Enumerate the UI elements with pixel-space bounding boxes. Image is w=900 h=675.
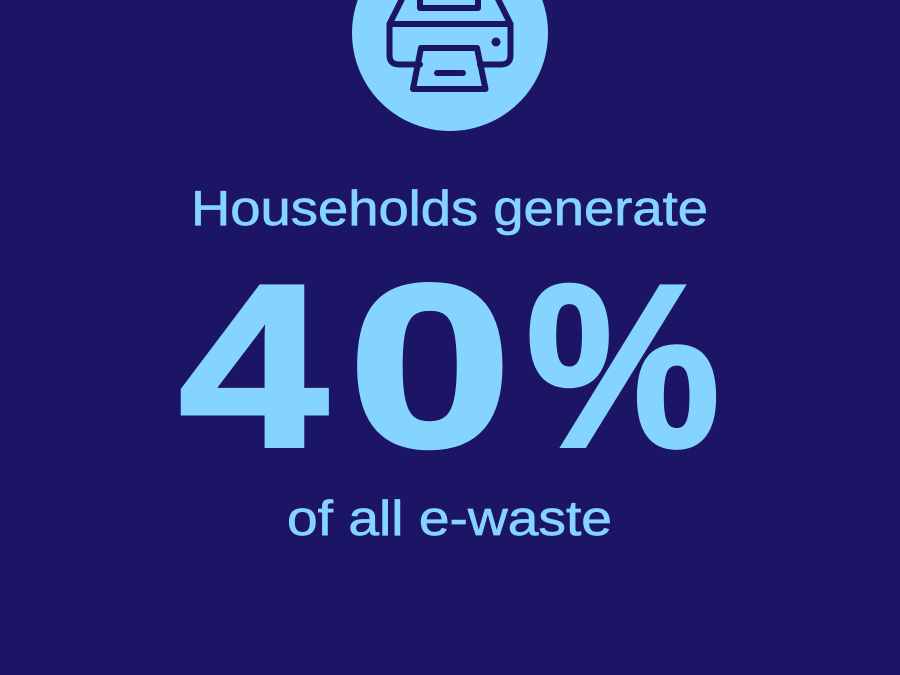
subheading: of all e-waste: of all e-waste xyxy=(287,492,612,546)
big number: 40% xyxy=(179,237,720,496)
big number: 40%: 4 xyxy=(179,237,328,496)
heading: Households generate: Households generate xyxy=(191,182,708,236)
big number: 40%: 0 xyxy=(348,237,512,496)
big number: 40%: % xyxy=(526,237,720,496)
icon: printer in circle xyxy=(352,0,548,131)
